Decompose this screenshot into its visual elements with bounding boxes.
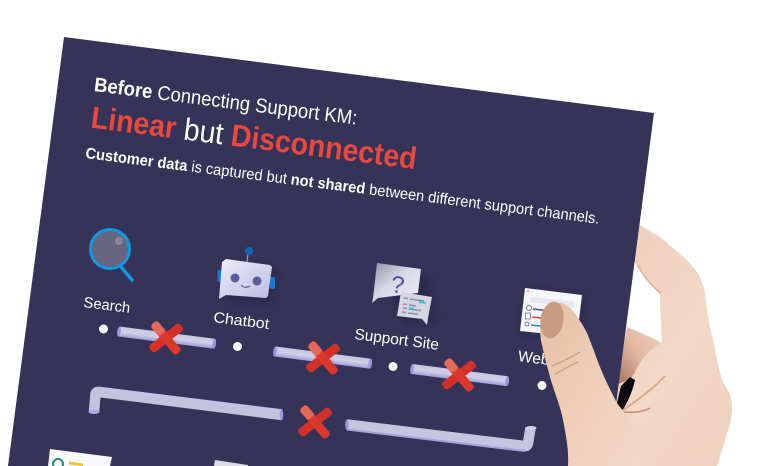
icon: magnifying glass	[90, 230, 132, 280]
icon: support site speech bubbles	[372, 263, 436, 325]
label: chatbot: Chatbot	[212, 309, 271, 333]
hand: thumb over the page	[537, 300, 640, 466]
heading: linear but disconnected: Linear but Disconnected	[89, 100, 419, 176]
red x marks	[148, 320, 477, 440]
icon: chatbot	[218, 247, 276, 302]
bottom card right	[214, 460, 248, 466]
panel: dark page	[8, 37, 654, 466]
icon: support site speech bubbles: ?	[389, 271, 406, 300]
bottom card left	[48, 449, 112, 466]
subheading text: Customer data is captured but not shared between different support channels.	[84, 145, 600, 228]
long pipe right	[345, 419, 536, 451]
heading: before connecting: Before Connecting Support KM:	[93, 74, 359, 130]
long pipe left	[88, 388, 283, 420]
label: search: Search	[82, 294, 131, 317]
hand: fingers behind the page	[568, 218, 732, 466]
broken pipe 3	[410, 364, 510, 386]
broken pipe 2	[273, 346, 373, 369]
timeline dots	[99, 324, 546, 390]
label: web: Web	[517, 348, 550, 369]
broken pipe 1	[117, 326, 217, 349]
label: support site: Support Site	[353, 326, 440, 354]
icon: web page card	[520, 288, 584, 339]
